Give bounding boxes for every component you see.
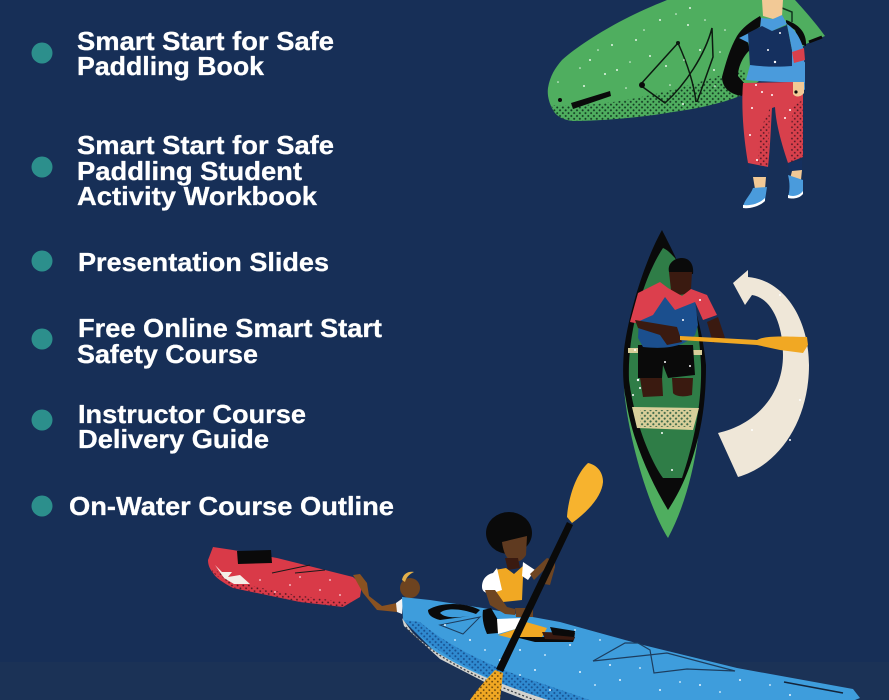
front kayaker	[482, 512, 575, 642]
red kayak	[208, 547, 362, 607]
item: Free Online Smart Start Safety Course: Free Online Smart Start	[78, 313, 382, 343]
item: Student Activity Workbook	[32, 130, 334, 211]
item: Student Activity Workbook: Activity Workbook	[77, 181, 318, 211]
illustration: kayakers	[208, 463, 860, 700]
item: Smart Start for Safe Paddling Book	[32, 26, 334, 81]
kayak paddle	[470, 463, 603, 700]
item: Smart Start for Safe Paddling Book: Paddling Book	[77, 51, 265, 81]
item: Instructor Course Delivery Guide: Delivery Guide	[78, 424, 269, 454]
item: Presentation Slides: Presentation Slides	[78, 247, 329, 277]
paddler figure	[722, 0, 806, 208]
bullet list	[32, 26, 394, 521]
item: Student Activity Workbook: Paddling Student	[77, 156, 302, 186]
item: Free Online Smart Start Safety Course	[32, 313, 382, 369]
canoe hull	[623, 230, 706, 538]
illustration: canoe	[623, 230, 808, 538]
canoe paddler	[630, 258, 725, 397]
blue kayak	[402, 597, 860, 700]
illustration: paddleboarder	[548, 0, 825, 208]
rear arm and head	[353, 572, 420, 614]
item: Instructor Course Delivery Guide	[32, 399, 306, 454]
item: Instructor Course Delivery Guide: Instructor Course	[78, 399, 306, 429]
water band	[0, 662, 889, 700]
paddleboard	[548, 0, 825, 121]
item: Free Online Smart Start Safety Course: Safety Course	[77, 339, 258, 369]
item: Smart Start for Safe Paddling Book: Smart Start for Safe	[77, 26, 334, 56]
item: On-Water Course Outline: On-Water Course Outline	[69, 491, 394, 521]
illustration: arrow	[718, 270, 809, 477]
canoe paddle	[680, 336, 808, 353]
item: Student Activity Workbook: Smart Start for Safe	[77, 130, 334, 160]
